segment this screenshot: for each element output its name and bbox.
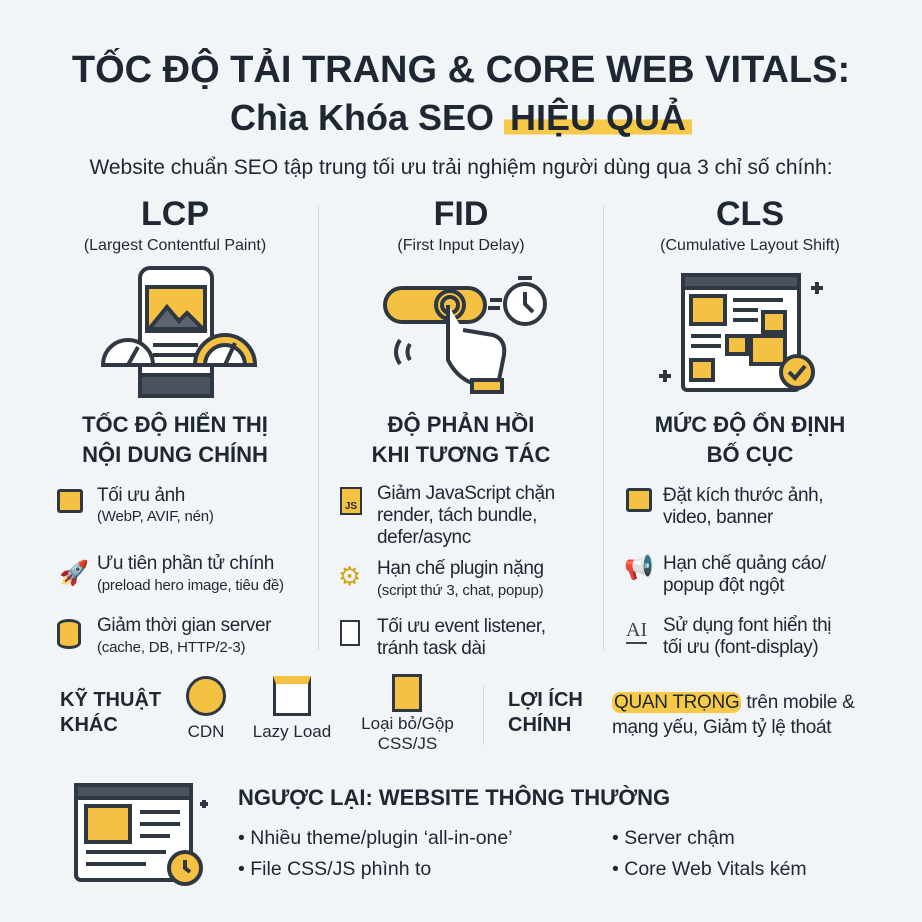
main benefits: CHÍNH — [508, 714, 571, 736]
title: Chìa Khóa SEO HIỆU QUẢ — [230, 97, 686, 138]
column: CLS: video, banner — [663, 507, 773, 528]
icon: font: AI — [626, 619, 647, 641]
section: regular websites: • Server chậm — [612, 827, 735, 849]
icon: JS file: JS — [345, 501, 357, 512]
CLS heading: CLS — [716, 195, 784, 233]
main benefits: LỢI ÍCH — [508, 689, 583, 711]
column: LCP: Tối ưu ảnh — [97, 485, 185, 506]
LCP heading: LCP — [141, 195, 209, 233]
LCP subheading: NỘI DUNG CHÍNH — [82, 442, 268, 467]
icon: JS file — [340, 487, 362, 515]
other techniques: CDN — [188, 722, 224, 741]
column: LCP: (Largest Contentful Paint) — [84, 237, 266, 254]
LCP list — [57, 485, 284, 656]
section: regular websites: • File CSS/JS phình to — [238, 858, 431, 880]
CLS subheading — [655, 412, 845, 467]
icon: hand tapping button — [383, 276, 547, 394]
FID list — [338, 483, 555, 659]
icon: database — [57, 619, 81, 649]
FID subheading: ĐỘ PHẢN HỒI — [388, 412, 534, 437]
icon: regular website — [74, 783, 208, 886]
column: LCP: (cache, DB, HTTP/2-3) — [97, 639, 245, 656]
main benefits — [508, 688, 854, 738]
column: FID: tránh task dài — [377, 638, 485, 659]
section: regular websites: NGƯỢC LẠI: WEBSITE THÔNG THƯỜNG — [238, 785, 670, 810]
icon: phone with gauges — [101, 266, 257, 398]
column: LCP — [57, 195, 284, 656]
section: regular websites — [238, 784, 807, 880]
column: FID: Giảm JavaScript chặn — [377, 483, 555, 504]
column: LCP: Ưu tiên phần tử chính — [97, 553, 274, 574]
other techniques: KHÁC — [60, 714, 118, 736]
icon: code file — [392, 674, 422, 712]
column: CLS: Đặt kích thước ảnh, — [663, 485, 823, 506]
column: FID: (First Input Delay) — [397, 237, 525, 254]
FID subheading — [372, 412, 550, 467]
other techniques — [60, 674, 454, 753]
column: FID: defer/async — [377, 527, 471, 548]
column: FID: render, tách bundle, — [377, 505, 537, 526]
main benefits: QUAN TRỌNG trên mobile & — [614, 692, 854, 713]
icon: notepad — [340, 620, 360, 646]
column: CLS — [624, 195, 845, 658]
column: FID: (script thứ 3, chat, popup) — [377, 582, 543, 599]
column: CLS: Sử dụng font hiển thị — [663, 615, 831, 636]
icon: rocket: 🚀 — [59, 560, 89, 587]
column: FID: Tối ưu event listener, — [377, 616, 546, 637]
icon: lazy load window — [273, 676, 311, 716]
CLS list — [624, 485, 831, 658]
column: LCP: (WebP, AVIF, nén) — [97, 508, 214, 525]
title — [72, 48, 850, 138]
column: CLS: tối ưu (font-display) — [663, 637, 818, 658]
title: TỐC ĐỘ TẢI TRANG & CORE WEB VITALS: — [72, 49, 850, 91]
LCP subheading — [82, 412, 268, 467]
subtitle: Website chuẩn SEO tập trung tối ưu trải nghiệm người dùng qua 3 chỉ số chính: — [89, 156, 833, 179]
icon: gear: ⚙ — [338, 561, 361, 591]
column: FID — [338, 195, 555, 659]
icon: layout with check — [659, 273, 823, 392]
column: CLS: popup đột ngột — [663, 575, 784, 596]
LCP subheading: TỐC ĐỘ HIỂN THỊ — [82, 412, 268, 437]
column: CLS: Hạn chế quảng cáo/ — [663, 553, 826, 574]
column: FID: Hạn chế plugin nặng — [377, 558, 544, 579]
main benefits: mạng yếu, Giảm tỷ lệ thoát — [612, 717, 831, 738]
FID heading: FID — [434, 195, 488, 233]
CLS subheading: MỨC ĐỘ ỔN ĐỊNH — [655, 412, 845, 437]
CLS subheading: BỐ CỤC — [707, 442, 793, 467]
other techniques: Loại bỏ/Gộp — [361, 714, 454, 733]
other techniques: KỸ THUẬT — [60, 689, 161, 711]
column: CLS: (Cumulative Layout Shift) — [660, 237, 840, 254]
other techniques: Lazy Load — [253, 722, 331, 741]
section: regular websites: • Core Web Vitals kém — [612, 858, 807, 880]
icon: image — [626, 488, 652, 512]
column: LCP: (preload hero image, tiêu đề) — [97, 577, 284, 594]
section: regular websites: • Nhiều theme/plugin ‘all-in-one’ — [238, 827, 513, 849]
icon: CDN globe — [186, 676, 226, 716]
icon: megaphone: 📢 — [624, 554, 654, 581]
icon: image — [57, 489, 83, 513]
column: LCP: Giảm thời gian server — [97, 615, 271, 636]
FID subheading: KHI TƯƠNG TÁC — [372, 442, 550, 467]
other techniques: CSS/JS — [378, 734, 437, 753]
